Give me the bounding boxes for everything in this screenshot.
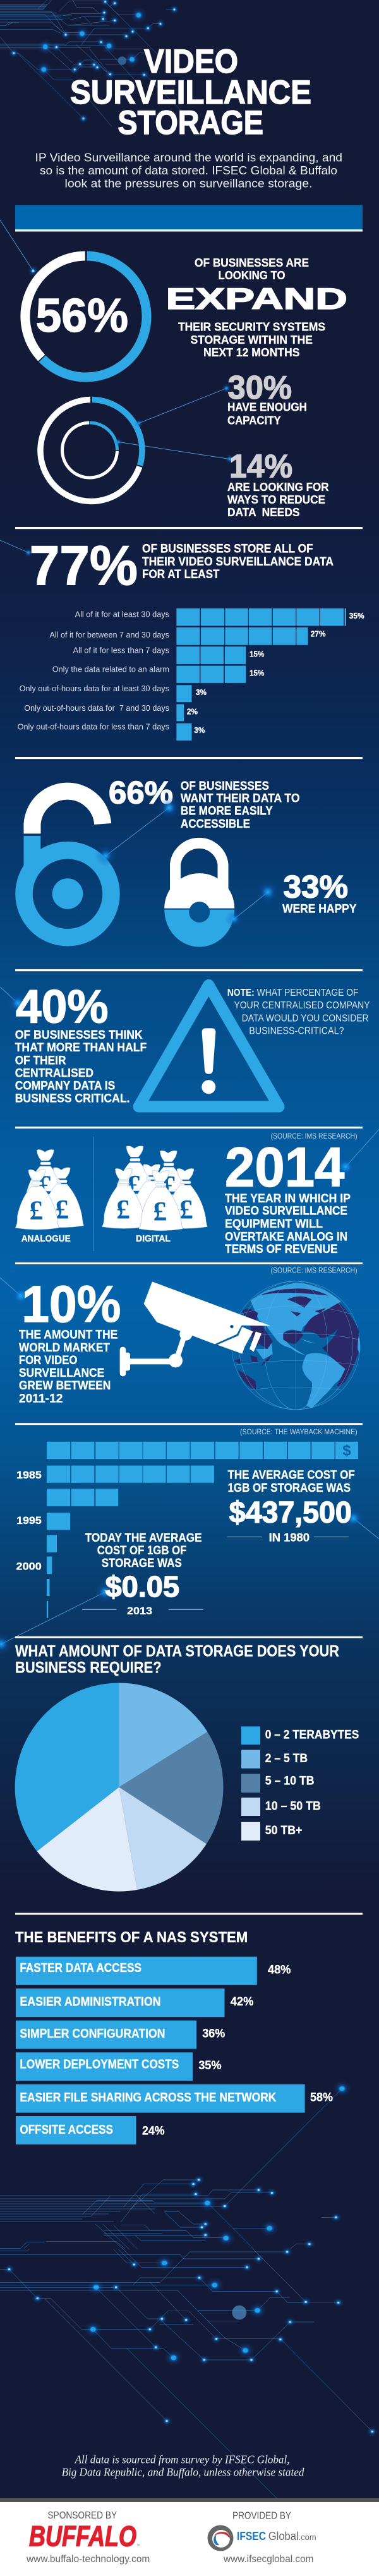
- intro paragraph: look at the pressures on surveillance storage.: [64, 177, 312, 190]
- bar labels: All of it for at least 30 days: [75, 609, 169, 619]
- icon: globe: [232, 1281, 360, 1410]
- benefit values: 24%: [142, 2124, 165, 2138]
- bar chart: retention: [18, 608, 364, 741]
- bar labels: Only the data related to an alarm: [52, 665, 169, 674]
- bar values: 3%: [194, 726, 205, 735]
- title: VIDEO: [144, 43, 238, 80]
- note text: [227, 988, 370, 1036]
- callout: cost in 2013: 2013: [127, 1605, 152, 1617]
- disclaimer: All data is sourced from survey by IFSEC Global,: [75, 2453, 290, 2465]
- stat: 30%: [227, 370, 307, 426]
- text: expand: STORAGE WITHIN THE: [191, 333, 313, 346]
- intro paragraph: so is the amount of data stored. IFSEC Global & Buffalo: [40, 164, 337, 177]
- stat: 10%: GREW BETWEEN: [19, 1379, 111, 1393]
- pie legend: 5 – 10 TB: [265, 1774, 315, 1788]
- bottom circuit decoration, upper part: [0, 2081, 351, 2249]
- sponsor block: www.buffalo-technology.com: [26, 2554, 150, 2565]
- bar values: 27%: [311, 629, 326, 638]
- note text: BUSINESS-CRITICAL?: [249, 1026, 344, 1036]
- stat: 77%: FOR AT LEAST: [142, 567, 220, 581]
- digital label: DIGITAL: [136, 1233, 171, 1244]
- callout: cost in 1980: THE AVERAGE COST OF: [227, 1468, 355, 1482]
- icon: closed padlock: [164, 843, 234, 947]
- icon: analogue money bags: £: [39, 1170, 52, 1200]
- icon: analogue money bags: [15, 1149, 84, 1230]
- intro paragraph: [35, 151, 342, 190]
- footer: [0, 2498, 379, 2576]
- pie legend: 50 TB+: [265, 1823, 302, 1837]
- stat: 30%: CAPACITY: [227, 414, 281, 426]
- title: [70, 43, 311, 142]
- stat: 33%: [225, 869, 357, 928]
- icon: digital money bags: £: [162, 1171, 176, 1201]
- stat: 77%: 77%: [30, 535, 138, 596]
- bottom circuit decoration, lower part: [0, 2247, 378, 2498]
- benefit labels: [20, 1961, 277, 2137]
- stat: 10%: WORLD MARKET: [19, 1341, 110, 1355]
- stat: 10%: 2011-12: [19, 1391, 63, 1405]
- stat: 77%: OF BUSINESSES STORE ALL OF: [142, 542, 313, 556]
- icon: digital money bags: £: [116, 1194, 130, 1225]
- sponsor block: BUFFALO: [29, 2520, 136, 2552]
- double donut chart: [40, 383, 235, 501]
- benefit values: [142, 1963, 333, 2138]
- bar labels: Only out-of-hours data for 7 and 30 days: [24, 703, 169, 713]
- year labels: [16, 1469, 42, 1572]
- stat: 40%: OF THEIR: [15, 1054, 66, 1067]
- source: IMS: (SOURCE: IMS RESEARCH): [271, 1132, 358, 1140]
- benefit labels: LOWER DEPLOYMENT COSTS: [20, 2058, 179, 2072]
- stat: 2014: EQUIPMENT WILL: [225, 1217, 323, 1231]
- blue banner: [15, 205, 363, 231]
- bar values: 35%: [349, 612, 364, 620]
- callout: cost in 2013: [0, 1532, 203, 1655]
- pie legend: [241, 1726, 359, 1841]
- benefit values: 42%: [231, 1995, 253, 2009]
- stat: 40%: COMPANY DATA IS: [15, 1080, 115, 1093]
- title: SURVEILLANCE: [70, 74, 311, 111]
- pie chart: [15, 1683, 224, 1891]
- provider block: .com: [299, 2532, 316, 2542]
- bar values: 3%: [196, 688, 207, 697]
- stat: 66%: [109, 775, 299, 831]
- cost bars: [47, 1442, 358, 1618]
- heading: data storage question: [15, 1643, 339, 1676]
- stat: 2014: TERMS OF REVENUE: [225, 1242, 338, 1256]
- benefit values: 48%: [268, 1963, 291, 1976]
- stat: 14%: 14%: [229, 449, 292, 485]
- callout: cost in 2013: $0.05: [105, 1570, 179, 1603]
- year labels: 1985: [16, 1469, 42, 1481]
- callout: cost in 1980: 1GB OF STORAGE WAS: [227, 1481, 351, 1495]
- stat: 10%: SURVEILLANCE: [19, 1366, 104, 1380]
- benefit labels: OFFSITE ACCESS: [20, 2123, 113, 2137]
- benefit values: 58%: [310, 2091, 333, 2105]
- provider block: [207, 2511, 316, 2565]
- stat: 33%: 33%: [283, 869, 348, 905]
- note text: NOTE: WHAT PERCENTAGE OF: [227, 988, 359, 998]
- benefit labels: FASTER DATA ACCESS: [20, 1961, 141, 1975]
- stat: 66%: OF BUSINESSES: [181, 780, 269, 793]
- icon: digital money bags: [102, 1146, 207, 1231]
- analogue label: ANALOGUE: [21, 1233, 71, 1244]
- stat: 40%: [0, 980, 147, 1105]
- text: expand: LOOKING TO: [219, 269, 286, 282]
- bar values: 15%: [250, 650, 264, 658]
- bar values: 2%: [187, 708, 198, 717]
- bars: [176, 608, 346, 741]
- benefit labels: EASIER ADMINISTRATION: [20, 1995, 161, 2009]
- disclaimer: Big Data Republic, and Buffalo, unless otherwise stated: [62, 2466, 304, 2479]
- icon: digital money bags: £: [153, 1197, 167, 1227]
- stat: 14%: WAYS TO REDUCE: [227, 493, 325, 506]
- provider block: Global: [268, 2530, 299, 2543]
- stat: 2014: [225, 1130, 379, 1256]
- sponsor block: [26, 2510, 150, 2565]
- stat: 40%: BUSINESS CRITICAL.: [15, 1092, 130, 1105]
- stat: 10%: 10%: [21, 1276, 121, 1333]
- pie legend: 0 – 2 TERABYTES: [265, 1727, 359, 1741]
- benefit values: 36%: [202, 2028, 225, 2041]
- logo mark: [207, 2525, 234, 2551]
- icon: security camera: [120, 1281, 270, 1376]
- bar values: 15%: [250, 669, 264, 678]
- bar chart: storage cost: [16, 1442, 358, 1618]
- callout: cost in 2013: TODAY THE AVERAGE: [85, 1532, 202, 1545]
- stat: 2014: OVERTAKE ANALOG IN: [225, 1230, 347, 1243]
- callout: cost in 1980: $437,500: [229, 1495, 352, 1529]
- stat: 33%: WERE HAPPY: [282, 902, 357, 916]
- benefit values: 35%: [198, 2059, 222, 2072]
- stat: 14%: DATA NEEDS: [227, 506, 299, 519]
- provider block: IFSEC: [237, 2530, 266, 2543]
- disclaimer: [62, 2453, 304, 2479]
- stat: 77%: [0, 535, 334, 596]
- callout: cost in 1980: [227, 1468, 379, 1544]
- text: expand: EXPAND: [165, 282, 347, 315]
- note text: DATA WOULD YOU CONSIDER: [242, 1013, 369, 1024]
- top circuit decoration: [0, 0, 185, 126]
- title: STORAGE: [117, 104, 263, 142]
- stat: 66%: BE MORE EASILY: [181, 805, 273, 818]
- stat: 10%: FOR VIDEO: [19, 1353, 77, 1367]
- stat: 10%: THE AMOUNT THE: [19, 1328, 117, 1342]
- text: expand: NEXT 12 MONTHS: [203, 346, 299, 359]
- text: expand: THEIR SECURITY SYSTEMS: [178, 320, 325, 334]
- year labels: 1995: [16, 1515, 42, 1527]
- bar chart: NAS benefits: [16, 1957, 333, 2144]
- stat: 77%: THEIR VIDEO SURVEILLANCE DATA: [142, 555, 334, 569]
- icon: digital money bags: £: [128, 1170, 141, 1200]
- stat: 14%: [227, 449, 328, 519]
- stat: 66%: WANT THEIR DATA TO: [181, 792, 299, 805]
- heading: NAS benefits: THE BENEFITS OF A NAS SYSTEM: [15, 1929, 248, 1946]
- callout: cost in 2013: COST OF 1GB OF: [97, 1544, 186, 1557]
- intro paragraph: IP Video Surveillance around the world is expanding, and: [35, 151, 342, 164]
- icon: open padlock: [24, 791, 111, 938]
- pie legend: 10 – 50 TB: [265, 1799, 321, 1813]
- source: IMS: (SOURCE: IMS RESEARCH): [271, 1266, 358, 1275]
- stat: 40%: OF BUSINESSES THINK: [15, 1029, 143, 1042]
- text: expand: [165, 256, 347, 359]
- donut chart: 56%: [25, 256, 147, 377]
- stat: 40%: CENTRALISED: [15, 1067, 93, 1080]
- stat: 2014: THE YEAR IN WHICH IP: [225, 1192, 351, 1206]
- sponsor block: TM: [136, 2543, 140, 2546]
- stat: 10%: [0, 1276, 121, 1405]
- pie legend: 2 – 5 TB: [265, 1751, 308, 1765]
- donut chart: 56%: 56%: [36, 289, 128, 342]
- benefit labels: EASIER FILE SHARING ACROSS THE NETWORK: [20, 2091, 277, 2105]
- benefit labels: SIMPLER CONFIGURATION: [20, 2027, 165, 2041]
- stat: 40%: THAT MORE THAN HALF: [15, 1041, 147, 1055]
- connector to 56% donut: [0, 220, 39, 277]
- heading: data storage question: BUSINESS REQUIRE?: [15, 1659, 162, 1676]
- source: Wayback Machine: (SOURCE: THE WAYBACK MACHINE): [240, 1427, 358, 1436]
- sponsor block: SPONSORED BY: [47, 2510, 117, 2521]
- stat: 30%: 30%: [227, 370, 292, 406]
- callout: cost in 1980: IN 1980: [269, 1531, 310, 1544]
- bar labels: [18, 609, 169, 732]
- icon: analogue money bags: £: [29, 1195, 43, 1226]
- bar labels: All of it for between 7 and 30 days: [49, 630, 169, 639]
- stat: 14%: ARE LOOKING FOR: [227, 481, 328, 493]
- icon: analogue money bags: £: [55, 1194, 69, 1225]
- callout: cost in 2013: STORAGE WAS: [102, 1557, 182, 1570]
- benefit bars: [16, 1957, 305, 2144]
- stat: 30%: HAVE ENOUGH: [227, 401, 307, 414]
- text: expand: OF BUSINESSES ARE: [195, 256, 309, 269]
- heading: data storage question: WHAT AMOUNT OF DATA STORAGE DOES YOUR: [15, 1643, 339, 1660]
- bar values: [187, 612, 364, 735]
- stat: 2014: 2014: [225, 1136, 344, 1199]
- bar labels: All of it for less than 7 days: [73, 646, 169, 655]
- icon: digital money bags: £: [179, 1194, 193, 1225]
- dollar sign: $: [342, 1442, 351, 1460]
- icon: warning triangle: [139, 985, 279, 1107]
- provider block: PROVIDED BY: [232, 2511, 291, 2522]
- stat: 66%: 66%: [109, 775, 173, 810]
- stat: 2014: VIDEO SURVEILLANCE: [225, 1204, 347, 1218]
- provider block: www.ifsecglobal.com: [223, 2554, 313, 2565]
- bar labels: Only out-of-hours data for less than 7 days: [18, 722, 169, 732]
- stat: 66%: ACCESSIBLE: [181, 818, 250, 831]
- connector: 66%: [95, 796, 181, 867]
- stat: 40%: 40%: [16, 980, 109, 1032]
- year labels: 2000: [16, 1561, 42, 1572]
- bar labels: Only out-of-hours data for at least 30 days: [20, 684, 169, 693]
